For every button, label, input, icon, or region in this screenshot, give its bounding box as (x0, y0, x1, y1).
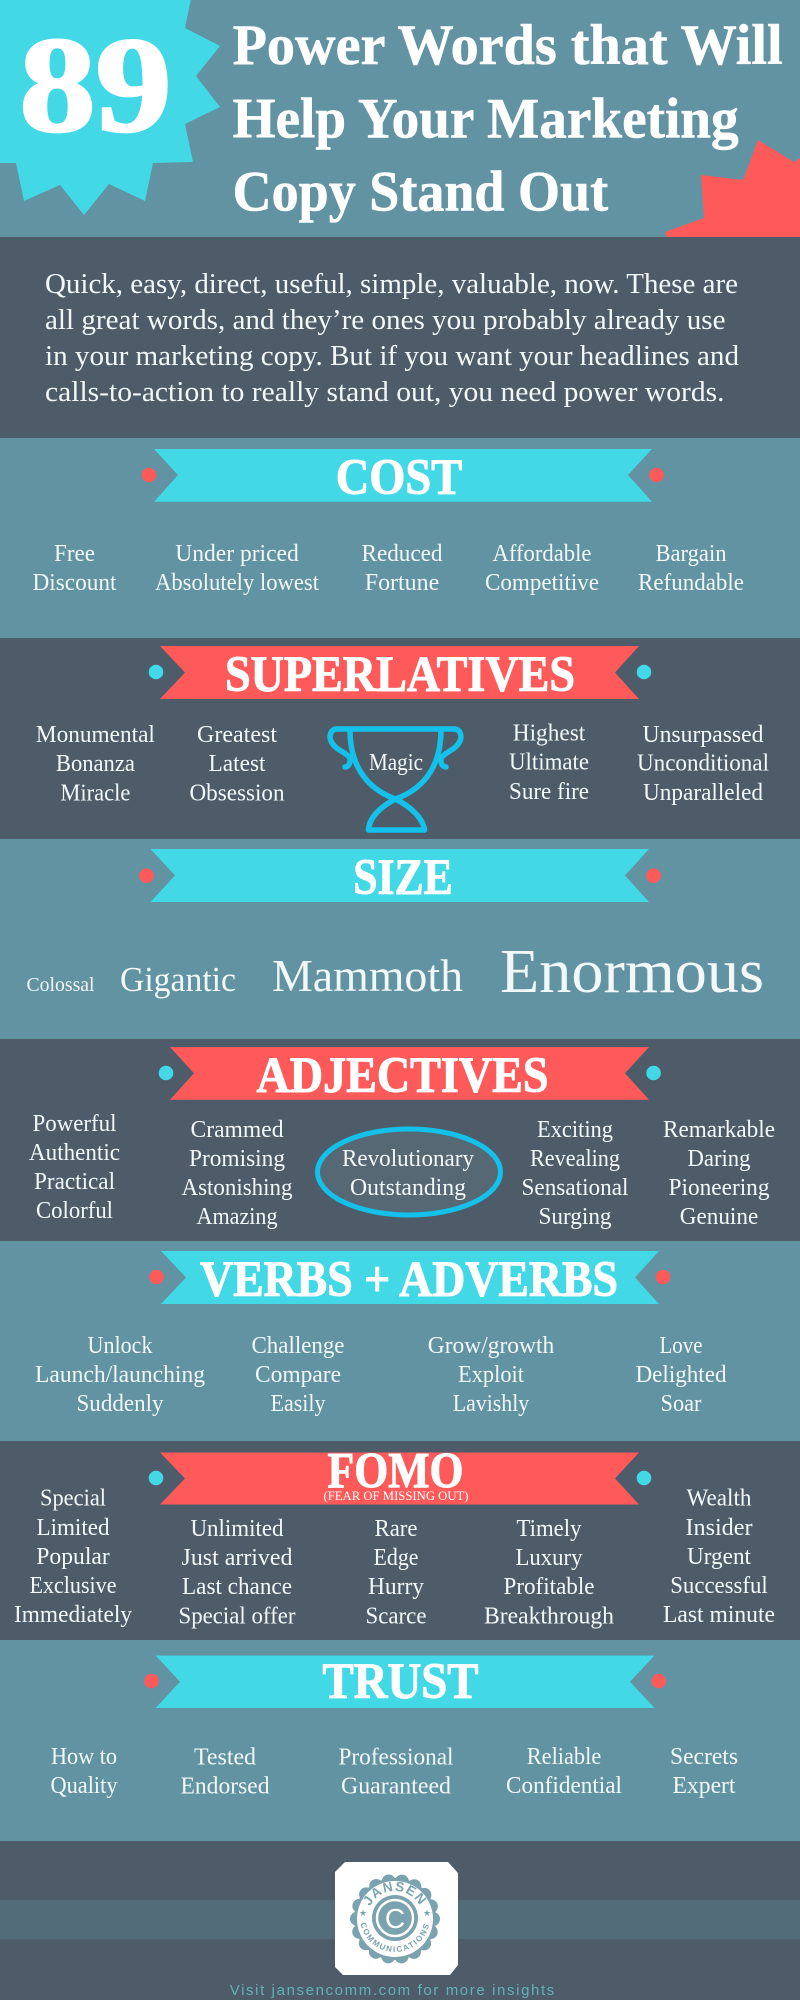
intro text (45, 268, 739, 408)
word column: Love (660, 1333, 702, 1359)
word column (509, 721, 589, 805)
word column: Reduced (362, 541, 442, 567)
word column (670, 1744, 738, 1799)
word column: Genuine (680, 1204, 758, 1230)
word column (522, 1117, 629, 1230)
word column (506, 1744, 622, 1799)
ribbon: size: SIZE (353, 850, 453, 906)
word column: Greatest (197, 722, 277, 748)
logo badge: COMMUNICATIONS (361, 1922, 429, 1952)
word column: Crammed (190, 1117, 284, 1143)
word column: Absolutely lowest (155, 570, 319, 596)
word column: Scarce (366, 1604, 426, 1630)
word column: Bargain (656, 541, 726, 567)
ribbon: size (139, 849, 661, 906)
word scale (26, 938, 764, 1006)
logo badge: ★ (359, 1908, 367, 1918)
word column (50, 1744, 118, 1799)
ribbon: fomo: (FEAR OF MISSING OUT) (324, 1489, 468, 1503)
intro text: Quick, easy, direct, useful, simple, valuable, now. These are (45, 268, 738, 300)
word column (36, 722, 155, 806)
ribbon: verbs and adverbs: VERBS + ADVERBS (200, 1252, 618, 1308)
word column: Free (54, 541, 95, 567)
intro text: in your marketing copy. But if you want your headlines and (45, 340, 739, 372)
word column: Secrets (670, 1744, 738, 1770)
footer link text: Visit jansencomm.com for more insights (230, 1982, 554, 1999)
word column: Amazing (196, 1204, 278, 1230)
word column: Lavishly (453, 1391, 529, 1417)
word column: Competitive (485, 570, 599, 596)
word column: Compare (255, 1362, 341, 1388)
word column: Obsession (190, 780, 284, 806)
ribbon: fomo (149, 1444, 651, 1504)
icon: trophy (330, 729, 461, 830)
word column: Monumental (36, 722, 155, 748)
word column: Easily (270, 1391, 326, 1417)
word column: Powerful (32, 1111, 117, 1137)
word column: Sensational (522, 1175, 629, 1201)
word scale: Mammoth (272, 950, 463, 1001)
word column: Reliable (527, 1744, 601, 1770)
word column: Discount (32, 570, 117, 596)
word column: Delighted (636, 1362, 726, 1388)
ellipse callout: Outstanding (350, 1175, 466, 1201)
logo badge: C (385, 1903, 405, 1934)
panel: verbs and adverbs (0, 1241, 800, 1441)
word column (338, 1744, 454, 1800)
word column: Successful (670, 1573, 768, 1599)
word column: Promising (189, 1146, 285, 1172)
word scale: Enormous (500, 938, 764, 1006)
word column: Exploit (458, 1362, 524, 1388)
word column: Last minute (663, 1602, 775, 1628)
title: Copy Stand Out (233, 161, 608, 224)
word scale: Colossal (26, 974, 95, 996)
logo badge: ★ (423, 1908, 431, 1918)
word column: Sure fire (509, 779, 589, 805)
word column: Unconditional (637, 750, 769, 776)
word column: Popular (36, 1544, 110, 1570)
word column (252, 1333, 344, 1417)
word column: How to (51, 1744, 117, 1770)
word column: Timely (516, 1516, 582, 1542)
word column: Unparalleled (643, 780, 763, 806)
word column (485, 541, 599, 596)
word column: Daring (688, 1146, 750, 1172)
panel: intro (0, 237, 800, 438)
word column: Profitable (504, 1574, 594, 1600)
word column: Tested (194, 1744, 256, 1770)
word column (14, 1486, 132, 1628)
word column: Immediately (14, 1602, 132, 1628)
word column: Remarkable (663, 1117, 775, 1143)
panel: cost (0, 438, 800, 638)
word column: Limited (36, 1515, 110, 1541)
word column: Insider (686, 1515, 752, 1541)
word column: Unsurpassed (642, 722, 764, 748)
trophy word: Magic (369, 750, 423, 776)
word column: Urgent (687, 1544, 751, 1570)
icon: cyan starburst (0, 0, 220, 215)
logo badge: JANSEN (364, 1882, 426, 1906)
word column (663, 1117, 775, 1230)
ribbon: trust: TRUST (322, 1654, 478, 1710)
word column: Unlimited (190, 1516, 284, 1542)
word column: Authentic (29, 1140, 120, 1166)
word column: Endorsed (180, 1774, 270, 1800)
word column: Confidential (506, 1773, 622, 1799)
word column: Under priced (175, 541, 299, 567)
word column: Practical (34, 1169, 115, 1195)
panel: header (0, 0, 800, 237)
word column (155, 541, 319, 596)
word column: Hurry (368, 1574, 424, 1600)
word column: Just arrived (182, 1545, 292, 1571)
word column (32, 541, 117, 596)
word column: Fortune (365, 570, 439, 596)
ribbon: trust (144, 1654, 666, 1710)
logo badge (335, 1862, 458, 1975)
intro text: all great words, and they’re ones you probably already use (45, 304, 725, 336)
word column: Unlock (88, 1333, 152, 1359)
word column: Expert (672, 1773, 736, 1799)
word column (29, 1111, 120, 1224)
ellipse callout (318, 1129, 500, 1215)
word column: Suddenly (76, 1391, 164, 1417)
panel: trust (0, 1640, 800, 1841)
panel: fomo (0, 1441, 800, 1640)
word column (362, 541, 442, 596)
word column: Grow/growth (428, 1333, 554, 1359)
word column (484, 1516, 614, 1630)
word column: Soar (660, 1391, 702, 1417)
word column (428, 1333, 554, 1417)
word column: Ultimate (509, 750, 589, 776)
word column (182, 1117, 292, 1230)
word column: Last chance (182, 1574, 292, 1600)
ribbon: superlatives: SUPERLATIVES (225, 647, 575, 703)
word column: Exclusive (30, 1573, 116, 1599)
icon: red starburst (665, 140, 800, 237)
word column: Quality (50, 1773, 118, 1799)
word column: Special offer (178, 1604, 296, 1630)
word column (35, 1333, 205, 1417)
word column: Breakthrough (484, 1604, 614, 1630)
word column: Latest (208, 751, 266, 777)
word column: Special (40, 1486, 106, 1512)
title: Power Words that Will (233, 14, 783, 77)
word scale: Gigantic (120, 960, 236, 999)
ribbon: cost: COST (336, 450, 462, 506)
word column: Luxury (516, 1545, 582, 1571)
title (233, 14, 783, 224)
word column (178, 1516, 296, 1630)
word column: Launch/launching (35, 1362, 205, 1388)
word column: Bonanza (56, 751, 135, 777)
panel: superlatives (0, 638, 800, 839)
word column (663, 1486, 775, 1628)
word column: Miracle (60, 780, 130, 806)
ellipse callout: Revolutionary (342, 1146, 474, 1172)
word column: Wealth (686, 1486, 752, 1512)
word column: Rare (374, 1516, 418, 1542)
panel: footer (0, 1862, 800, 1999)
word column: Astonishing (182, 1175, 292, 1201)
word column: Affordable (492, 541, 592, 567)
intro text: calls-to-action to really stand out, you need power words. (45, 376, 724, 408)
word column: Guaranteed (341, 1774, 451, 1800)
word column: Highest (513, 721, 586, 747)
ribbon: adjectives (159, 1047, 661, 1104)
ribbon: fomo: FOMO (328, 1444, 464, 1500)
panel: adjectives (0, 1039, 800, 1241)
word column: Revealing (530, 1146, 620, 1172)
word column: Surging (538, 1204, 612, 1230)
word column (190, 722, 284, 806)
word column (366, 1516, 426, 1630)
word column: Exciting (537, 1117, 613, 1143)
number 89: 89 (20, 10, 172, 160)
word column (638, 541, 744, 596)
title: Help Your Marketing (233, 88, 739, 151)
word column: Challenge (252, 1333, 344, 1359)
word column: Refundable (638, 570, 744, 596)
word column (180, 1744, 270, 1800)
word column: Pioneering (668, 1175, 770, 1201)
word column (636, 1333, 726, 1417)
ribbon: cost (142, 449, 664, 506)
word column: Professional (338, 1744, 454, 1770)
word column (637, 722, 769, 806)
panel: size (0, 839, 800, 1039)
word column: Colorful (36, 1198, 113, 1224)
word column: Edge (374, 1545, 418, 1571)
ribbon: adjectives: ADJECTIVES (256, 1048, 548, 1104)
